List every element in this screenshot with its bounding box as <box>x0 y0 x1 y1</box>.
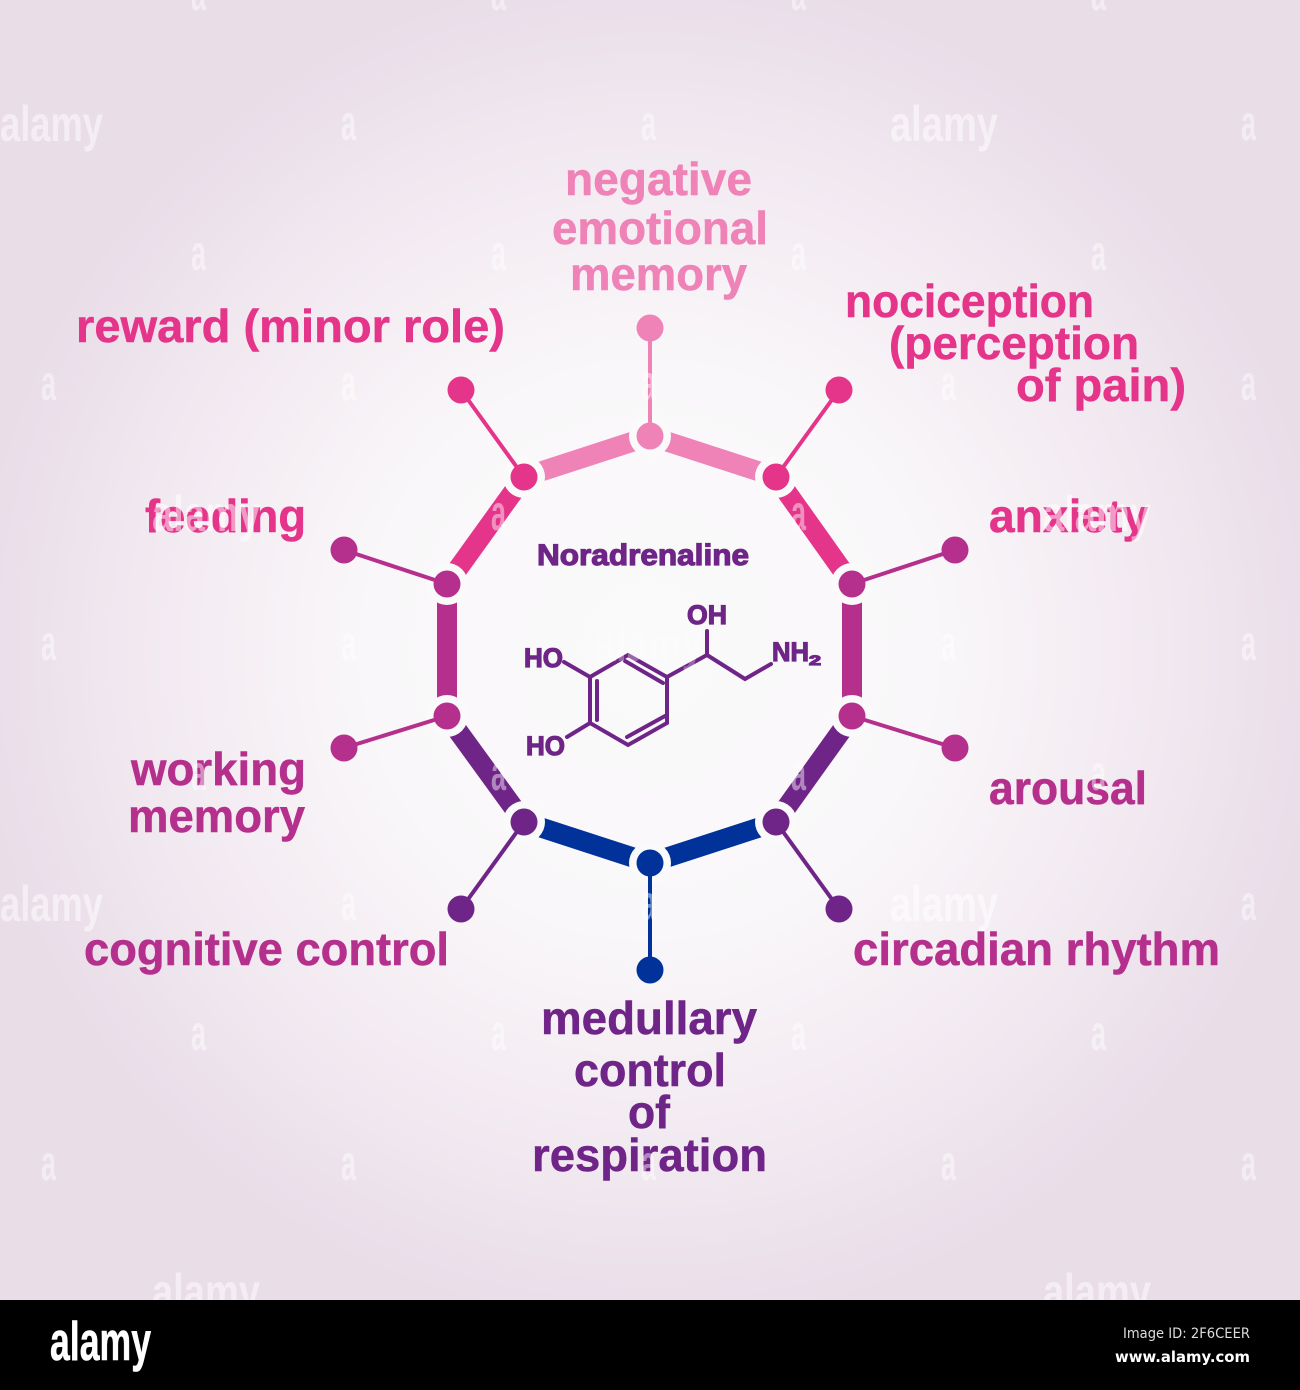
watermark pattern: alamy <box>890 876 998 932</box>
watermark pattern: a <box>791 485 807 541</box>
watermark pattern: a <box>1241 355 1257 411</box>
label: nociception: nociception <box>845 275 1094 327</box>
watermark pattern: a <box>941 615 957 671</box>
branch: cognitive control <box>448 808 538 922</box>
watermark pattern: a <box>341 1135 357 1191</box>
watermark pattern: a <box>1241 875 1257 931</box>
branch: negative emotional memory <box>636 314 664 450</box>
label: nociception: of pain) <box>1016 359 1186 411</box>
footer url: www.alamy.com <box>1115 1348 1250 1366</box>
noradrenaline structural formula: OH <box>687 600 727 630</box>
compound name: Noradrenaline <box>537 539 749 572</box>
label: negative emotional memory: emotional <box>552 202 768 254</box>
label: medullary control of respiration: control <box>574 1044 726 1096</box>
watermark pattern: a <box>791 225 807 281</box>
watermark pattern: a <box>341 875 357 931</box>
label: medullary control of respiration: respiration <box>532 1129 767 1181</box>
label: feeding: feeding <box>145 490 306 542</box>
label: negative emotional memory: negative <box>565 153 752 205</box>
watermark pattern: a <box>41 615 57 671</box>
label: medullary control of respiration: medullary <box>541 992 757 1044</box>
label: anxiety: anxiety <box>989 490 1148 542</box>
watermark pattern: alamy <box>152 1264 260 1320</box>
label: working memory: memory <box>128 790 305 842</box>
label: negative emotional memory <box>552 153 768 300</box>
branch: circadian rhythm <box>762 808 852 922</box>
watermark pattern: a <box>791 1005 807 1061</box>
branch: medullary control <box>636 850 664 984</box>
watermark pattern: a <box>1241 1135 1257 1191</box>
noradrenaline structural formula: NH <box>772 637 809 667</box>
watermark pattern: alamy <box>1043 1264 1151 1320</box>
watermark pattern: a <box>191 225 207 281</box>
watermark pattern: a <box>491 225 507 281</box>
watermark pattern: a <box>791 745 807 801</box>
watermark pattern: a <box>1091 225 1107 281</box>
watermark pattern: alamy <box>890 96 998 152</box>
watermark pattern: a <box>641 1135 657 1191</box>
watermark pattern: a <box>1091 1005 1107 1061</box>
watermark pattern: a <box>341 95 357 151</box>
watermark pattern: a <box>191 1005 207 1061</box>
branch: anxiety <box>838 536 968 598</box>
branch: feeding <box>330 536 460 598</box>
branch: nociception <box>762 376 852 490</box>
watermark pattern: a <box>491 745 507 801</box>
watermark pattern: a <box>641 95 657 151</box>
noradrenaline structural formula: 2 <box>809 652 821 668</box>
watermark pattern: a <box>341 355 357 411</box>
watermark pattern: a <box>1241 615 1257 671</box>
label: reward: reward (minor role) <box>76 300 505 352</box>
label: cognitive control: cognitive control <box>84 923 449 975</box>
watermark pattern: a <box>1241 95 1257 151</box>
decagon ring: coloured segments <box>447 436 852 863</box>
watermark pattern: a <box>641 875 657 931</box>
branch: working memory <box>330 702 460 762</box>
label: working memory <box>128 743 306 842</box>
watermark pattern: a <box>941 1135 957 1191</box>
watermark pattern: a <box>41 1135 57 1191</box>
label: nociception: (perception <box>889 317 1139 369</box>
branch: reward <box>448 376 538 490</box>
watermark pattern: a <box>191 745 207 801</box>
watermark pattern: alamy <box>1043 486 1151 542</box>
watermark pattern: a <box>941 355 957 411</box>
watermark pattern: alamy <box>595 616 703 672</box>
footer logo: alamy <box>50 1310 151 1372</box>
label: medullary control of respiration: of <box>628 1086 671 1138</box>
gaps around ring nodes <box>426 415 873 884</box>
watermark pattern: a <box>341 615 357 671</box>
watermark pattern: a <box>1091 745 1107 801</box>
label: circadian rhythm: circadian rhythm <box>853 923 1220 975</box>
footer bar <box>0 1300 1300 1390</box>
watermark pattern: alamy <box>0 96 103 152</box>
noradrenaline structural formula: HO <box>526 731 565 761</box>
label: nociception <box>845 275 1186 411</box>
footer image id: Image ID: 2F6CEER <box>1123 1326 1250 1342</box>
watermark pattern: a <box>491 1005 507 1061</box>
label: medullary control of respiration <box>532 992 767 1181</box>
watermark pattern: a <box>41 355 57 411</box>
noradrenaline structural formula: HO <box>524 643 563 673</box>
watermark pattern: alamy <box>0 876 103 932</box>
watermark pattern: alamy <box>152 486 260 542</box>
watermark pattern: a <box>491 485 507 541</box>
label: working memory: working <box>130 743 306 795</box>
noradrenaline structural formula <box>524 600 821 761</box>
label: arousal: arousal <box>989 762 1147 814</box>
branch: arousal <box>838 702 968 762</box>
watermark pattern: a <box>641 355 657 411</box>
label: negative emotional memory: memory <box>570 248 747 300</box>
